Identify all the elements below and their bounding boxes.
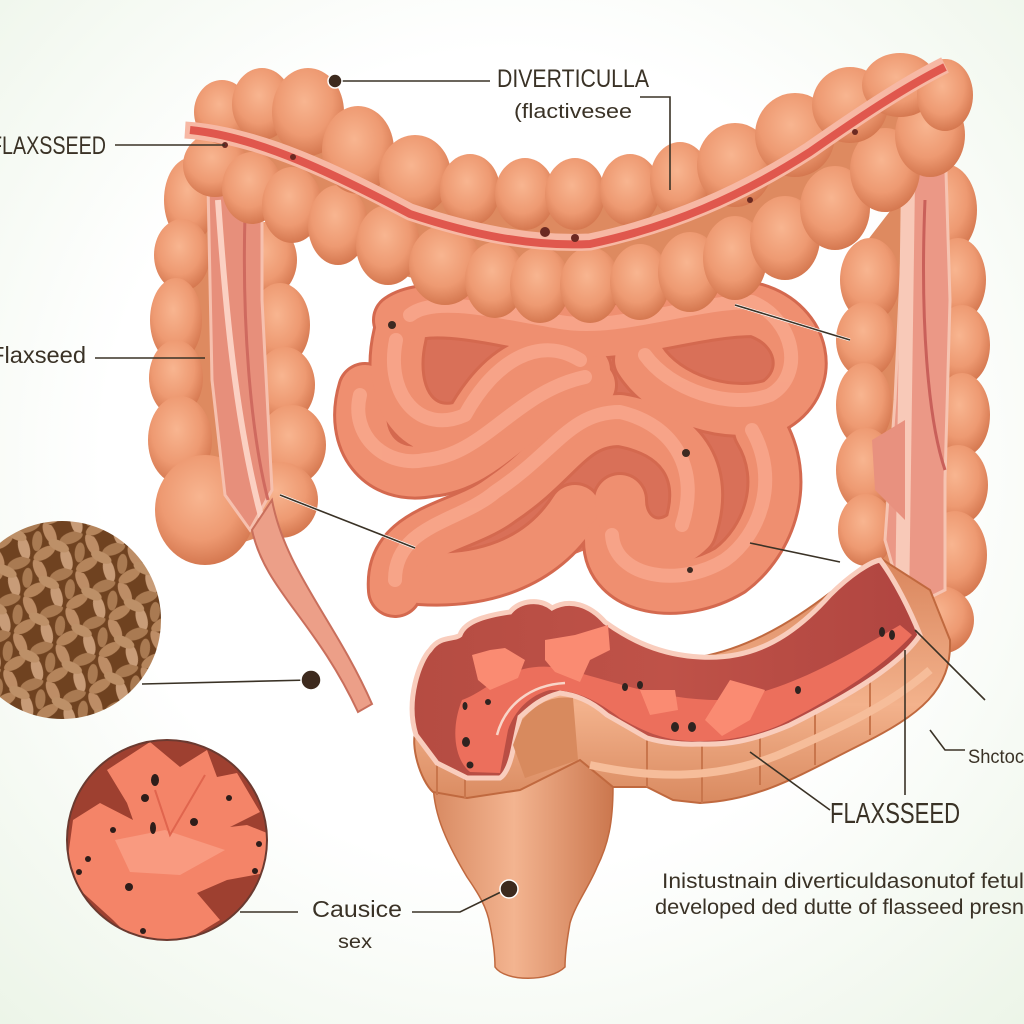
seeds on intestine [388,321,693,573]
descending colon [836,140,990,654]
flaxseed circle [0,520,170,720]
label: diverticulla: DIVERTICULLA [497,65,649,93]
small intestine [358,302,800,590]
label dots [301,74,518,898]
tissue circle [67,740,267,940]
caption [655,870,1024,919]
rectum and sigmoid opened section [412,558,950,803]
label: flactivesee: (flactivesee [514,101,632,123]
caption: developed ded dutte of flasseed presn [655,896,1024,919]
caption: Inistustnain diverticuldasonutof fetul [662,870,1024,893]
label: causice: Causice [312,896,402,922]
ascending colon [148,158,326,565]
label: flaxseed bottom: FLAXSSEED [830,798,960,830]
transverse colon [183,53,973,323]
tissue circle outline [67,740,267,940]
ascending colon inner band [208,185,372,712]
anal canal stump [433,755,613,978]
label: sex: sex [338,932,373,953]
transverse colon inner band [185,65,945,244]
descending colon inner band [872,140,950,610]
leader lines [95,81,985,912]
